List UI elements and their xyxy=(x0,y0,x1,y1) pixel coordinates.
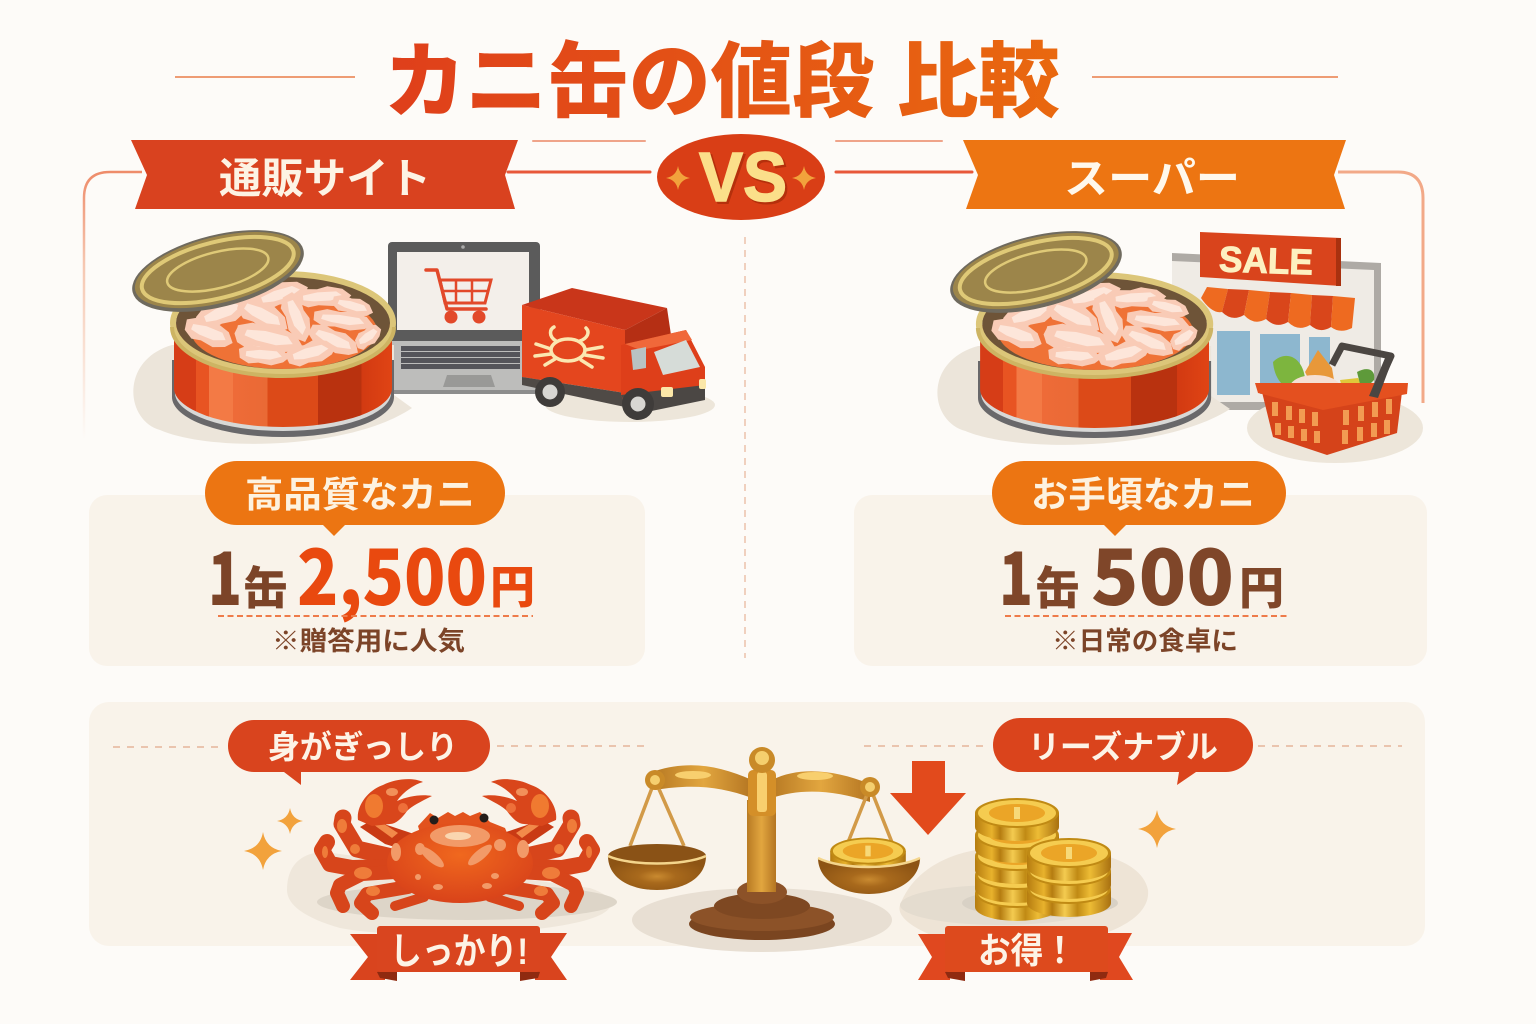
note left: ※贈答用に人気 xyxy=(272,626,465,656)
sparkles left xyxy=(244,808,303,870)
price: 2,500 yen: 円 xyxy=(490,551,535,616)
illustration: laptop xyxy=(388,242,540,394)
illustration: delivery truck xyxy=(522,288,715,422)
illustration: storefront xyxy=(1172,253,1381,410)
sign: SALE: SALE xyxy=(1218,238,1314,283)
coin shadow xyxy=(899,847,1148,945)
icon: cart xyxy=(426,270,491,324)
title rule right xyxy=(1092,76,1338,78)
price: 2,500 yen: 1 xyxy=(208,521,242,626)
bottom panel xyxy=(89,702,1425,946)
pill: affordable crab xyxy=(992,461,1286,536)
bubble: reasonable xyxy=(993,718,1253,785)
sign: SALE xyxy=(1200,232,1341,286)
bubble: packed meat: 身がぎっしり xyxy=(268,729,458,765)
banner: supermarket: スーパー xyxy=(1064,155,1240,202)
ribbon: solid: しっかり! xyxy=(390,931,528,972)
left panel frame xyxy=(84,172,142,440)
banner: online shop: 通販サイト xyxy=(219,155,431,202)
ribbon: great deal: お得！ xyxy=(978,930,1076,971)
connector lines to VS xyxy=(508,141,972,172)
bubble: reasonable: リーズナブル xyxy=(1028,729,1218,765)
banner: supermarket xyxy=(963,140,1346,209)
price panel left xyxy=(89,461,645,666)
pill: quality crab: 高品質なカニ xyxy=(245,474,475,515)
VS badge: VS xyxy=(701,140,789,218)
ribbon: solid xyxy=(350,926,567,981)
note right: ※日常の食卓に xyxy=(1052,626,1238,656)
price: 500 yen: 缶 xyxy=(1035,552,1080,617)
title: カニ缶の値段 比較 xyxy=(384,37,1060,128)
pill: quality crab xyxy=(205,461,505,536)
price: 500 yen: 500 xyxy=(1091,517,1234,627)
price: 500 yen xyxy=(999,517,1284,627)
dashed rules xyxy=(113,746,1402,747)
illustration: can left xyxy=(124,215,412,444)
title rule left xyxy=(175,76,355,78)
icon: down arrow xyxy=(890,761,966,835)
banner: online shop xyxy=(131,140,518,209)
VS badge xyxy=(657,134,825,220)
pill: affordable crab: お手頃なカニ xyxy=(1031,474,1255,515)
price: 500 yen: 円 xyxy=(1239,552,1284,617)
illustration: can right xyxy=(937,216,1230,445)
illustration: balance scale xyxy=(608,747,920,952)
price: 2,500 yen: 缶 xyxy=(243,552,288,617)
illustration: crab xyxy=(322,779,592,913)
price panel right xyxy=(854,461,1427,666)
center divider xyxy=(744,237,746,658)
VS badge: VS xyxy=(699,138,787,216)
right panel frame xyxy=(1338,172,1423,403)
illustration: coin stacks xyxy=(975,798,1111,921)
price: 500 yen: 1 xyxy=(999,521,1033,626)
price: 2,500 yen xyxy=(208,517,535,627)
bubble: packed meat xyxy=(228,720,490,785)
price: 2,500 yen: 2,500 xyxy=(297,517,487,627)
ribbon: great deal xyxy=(918,926,1133,981)
sparkle right xyxy=(1138,810,1176,848)
crab shadow xyxy=(287,852,617,934)
illustration: shopping basket xyxy=(1247,346,1423,463)
